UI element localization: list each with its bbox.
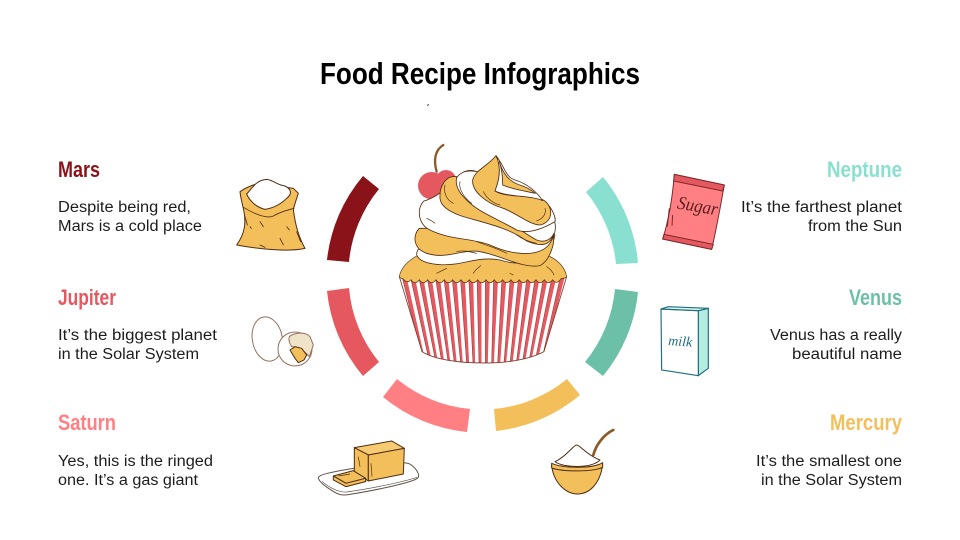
text block: Venus: beautiful name	[792, 346, 902, 363]
text block: Mercury: Mercury	[830, 410, 903, 435]
icon: cupcake	[397, 145, 570, 365]
text block: Jupiter: Jupiter	[58, 285, 116, 310]
text block: Neptune: It’s the farthest planet	[741, 199, 903, 216]
arc segment: Mars	[327, 176, 379, 262]
text block: Venus: Venus	[849, 285, 902, 310]
text block: Saturn: Yes, this is the ringed	[58, 453, 213, 470]
text block: Jupiter: It’s the biggest planet	[58, 327, 218, 344]
text block: Saturn	[58, 410, 213, 489]
text block: Saturn: one. It’s a gas giant	[58, 472, 199, 489]
text block: Mars	[58, 157, 202, 235]
icon: butter	[318, 441, 419, 495]
text block: Mars: Despite being red,	[58, 199, 191, 216]
icon: milk carton	[661, 307, 708, 376]
icon: sugar packet	[663, 174, 724, 249]
arc segment: Neptune	[586, 177, 638, 264]
text block: Venus: Venus has a really	[770, 327, 902, 344]
arc segment: Venus	[585, 289, 638, 376]
icon: eggs	[249, 314, 313, 366]
icon: milk carton: milk	[668, 334, 693, 351]
text block: Mercury: It’s the smallest one	[756, 453, 902, 470]
text block: Mars: Mars is a cold place	[58, 218, 202, 235]
text block: Venus	[770, 285, 902, 363]
text block: Saturn: Saturn	[58, 410, 116, 435]
text block: Neptune: Neptune	[827, 157, 902, 182]
text block: Mars: Mars	[58, 157, 100, 182]
title: Food Recipe Infographics	[320, 56, 640, 91]
arc segment: Mercury	[494, 379, 580, 431]
text block: Neptune: from the Sun	[808, 218, 902, 235]
text block: Jupiter: in the Solar System	[58, 346, 199, 363]
icon: flour bowl	[552, 430, 613, 494]
arc segment: Saturn	[383, 379, 470, 432]
icon: sugar packet: Sugar	[676, 193, 720, 220]
text block: Jupiter	[58, 285, 218, 363]
arc segment: Jupiter	[327, 288, 379, 376]
text block: Mercury	[756, 410, 903, 489]
text block: Mercury: in the Solar System	[761, 472, 902, 489]
text block: Neptune	[741, 157, 903, 235]
icon: flour sack	[237, 179, 305, 250]
